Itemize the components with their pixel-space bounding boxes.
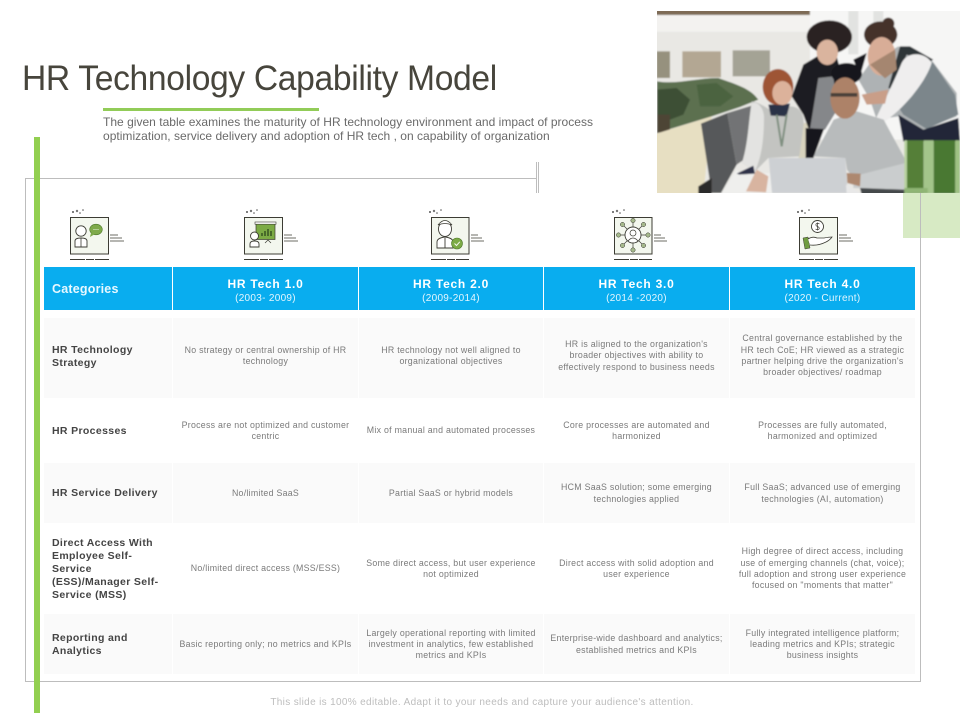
header cell: categories (44, 267, 172, 310)
icon: hand holding dollar coin (797, 209, 853, 260)
row: HR Processes (52, 420, 887, 441)
cell: tech 2.0: investment in analytics, few established (369, 639, 533, 649)
cell: tech 1.0 (173, 318, 358, 398)
cell: tech 4.0: partner helping drive the organization's (741, 356, 904, 366)
row: Reporting and Analytics (52, 628, 899, 660)
icon: person with check badge (429, 209, 484, 260)
cell: tech 3.0 (563, 420, 710, 441)
table header (44, 267, 915, 310)
cell: tech 1.0: No strategy or central ownership of HR (185, 345, 346, 355)
floor behind people (799, 123, 809, 158)
row label (44, 614, 172, 674)
cell: tech 3.0 (544, 318, 729, 398)
cell: tech 4.0: Processes are fully automated, (758, 420, 887, 430)
row label: HR Service Delivery (52, 487, 158, 499)
cell: tech 2.0: Mix of manual and automated processes (367, 425, 535, 435)
cell: tech 4.0: Full SaaS; advanced use of emerging (744, 482, 901, 492)
man with vest (858, 46, 957, 130)
cell: tech 1.0: Basic reporting only; no metrics and KPIs (180, 639, 351, 649)
cell: tech 3.0: Enterprise-wide dashboard and analytics; (550, 633, 723, 643)
cell: tech 4.0 (730, 463, 915, 523)
header cell: HR Tech 3.0: HR Tech 3.0 (598, 277, 675, 291)
cell: tech 1.0 (173, 463, 358, 523)
cell: tech 2.0: Largely operational reporting with limited (366, 628, 536, 638)
cell: tech 3.0 (559, 558, 714, 579)
cell: tech 3.0: Core processes are automated and (563, 420, 710, 430)
cell: tech 2.0 (366, 558, 536, 579)
cell: tech 3.0: HCM SaaS solution; some emerging (561, 482, 712, 492)
cell: tech 4.0: focused on "moments that matter" (752, 580, 893, 590)
cell: tech 4.0 (739, 546, 906, 590)
woman with red hair (742, 101, 804, 171)
intro text: optimization, service delivery and adoption of HR tech , on capability of organization (103, 129, 550, 143)
cell: tech 2.0: organizational objectives (399, 356, 503, 366)
green tint overlay (904, 140, 907, 194)
row label: Service (52, 562, 92, 574)
cell: tech 4.0: use of emerging channels (chat, voice); (740, 558, 905, 568)
cell: tech 4.0: HR tech CoE; HR viewed as a strategic (741, 345, 904, 355)
cell: tech 4.0 (730, 614, 915, 674)
header cell: categories: Categories (52, 282, 119, 296)
cell: tech 3.0 (544, 463, 729, 523)
cell: tech 3.0: effectively respond to business needs (558, 362, 715, 372)
header cell: HR Tech 1.0 (173, 267, 358, 310)
cell: tech 3.0: user experience (603, 569, 670, 579)
cell: tech 4.0: technologies (AI, automation) (761, 494, 884, 504)
cell: tech 1.0: technology (243, 356, 288, 366)
green vertical accent bar (34, 137, 40, 713)
title: HR Technology Capability Model (22, 59, 497, 98)
row label (44, 463, 172, 523)
cell: tech 1.0 (182, 420, 349, 441)
cell: tech 4.0: broader objectives/ roadmap (763, 367, 882, 377)
cell: tech 4.0: Central governance established by the (742, 333, 903, 343)
row label: Service (MSS) (52, 588, 127, 600)
cell: tech 3.0: technologies applied (594, 494, 679, 504)
cell: tech 2.0 (359, 463, 543, 523)
header cell: HR Tech 2.0 (359, 267, 543, 310)
cell: tech 3.0: established metrics and KPIs (576, 644, 697, 654)
header cell: HR Tech 1.0: HR Tech 1.0 (227, 277, 304, 291)
row: HR Service Delivery (52, 482, 901, 504)
header cell: HR Tech 3.0: (2014 -2020) (606, 293, 667, 304)
header cell: HR Tech 1.0: (2003- 2009) (235, 293, 296, 304)
icon: presenter with chart board (244, 209, 298, 260)
header cell: HR Tech 3.0 (544, 267, 729, 310)
cell: tech 1.0: No/limited direct access (MSS/ESS) (191, 563, 340, 573)
row label: Analytics (52, 644, 102, 656)
cell: tech 2.0: not optimized (423, 569, 479, 579)
row label: Reporting and (52, 632, 128, 644)
header cell: HR Tech 4.0: HR Tech 4.0 (784, 277, 861, 291)
photo: team around a laptop (657, 11, 960, 193)
cell: tech 4.0: full adoption and strong user experience (739, 569, 906, 579)
row label: Strategy (52, 356, 97, 368)
header cell: HR Tech 2.0: (2009-2014) (422, 293, 480, 304)
icon: person with speech bubble (70, 209, 124, 260)
cell: tech 2.0: HR technology not well aligned to (381, 345, 521, 355)
decorative light green block (903, 193, 960, 238)
seated man with glasses (814, 111, 905, 191)
cell: tech 4.0: leading metrics and KPIs; strategic (750, 639, 895, 649)
row label (44, 318, 172, 398)
cell: tech 3.0: broader objectives with ability to (570, 350, 703, 360)
cell: tech 3.0: Direct access with solid adoption and (559, 558, 714, 568)
cell: tech 1.0: Process are not optimized and customer (182, 420, 349, 430)
cell: tech 4.0 (758, 420, 887, 441)
row label: Employee Self- (52, 550, 132, 562)
cell: tech 2.0: Partial SaaS or hybrid models (389, 488, 513, 498)
row: HR Technology Strategy (52, 333, 904, 377)
curly haired woman (792, 56, 844, 128)
header cell: HR Tech 2.0: HR Tech 2.0 (413, 277, 489, 291)
icon: person network (612, 209, 667, 260)
cell: tech 2.0 (359, 614, 543, 674)
green title underline (103, 108, 319, 111)
header cell: HR Tech 4.0: (2020 - Current) (785, 293, 860, 304)
row label: HR Technology (52, 344, 133, 356)
cell: tech 1.0: centric (252, 431, 279, 441)
cell: tech 2.0 (359, 318, 543, 398)
intro text (103, 115, 593, 143)
cell: tech 2.0: metrics and KPIs (416, 650, 486, 660)
footer note: This slide is 100% editable. Adapt it to your needs and capture your audience's attention. (270, 697, 694, 708)
cell: tech 4.0: business insights (787, 650, 858, 660)
cell: tech 4.0: High degree of direct access, including (742, 546, 903, 556)
cell: tech 1.0 (173, 614, 358, 674)
cell: tech 4.0: Fully integrated intelligence platform; (746, 628, 899, 638)
row label (52, 536, 158, 600)
cell: tech 3.0: harmonized (612, 431, 661, 441)
cell: tech 2.0: Some direct access, but user experience (366, 558, 536, 568)
cell: tech 3.0: HR is aligned to the organization's (565, 339, 708, 349)
row label: HR Processes (52, 424, 127, 436)
row label: (ESS)/Manager Self- (52, 576, 158, 588)
row: Direct Access (52, 536, 906, 600)
intro text: The given table examines the maturity of HR technology environment and impact of process (103, 115, 593, 129)
header cell: HR Tech 4.0 (730, 267, 915, 310)
row label: Direct Access With (52, 536, 153, 548)
cell: tech 4.0 (730, 318, 915, 398)
laptop (769, 158, 848, 193)
cell: tech 3.0 (544, 614, 729, 674)
cell: tech 4.0: harmonized and optimized (768, 431, 877, 441)
cell: tech 1.0: No/limited SaaS (232, 488, 299, 498)
